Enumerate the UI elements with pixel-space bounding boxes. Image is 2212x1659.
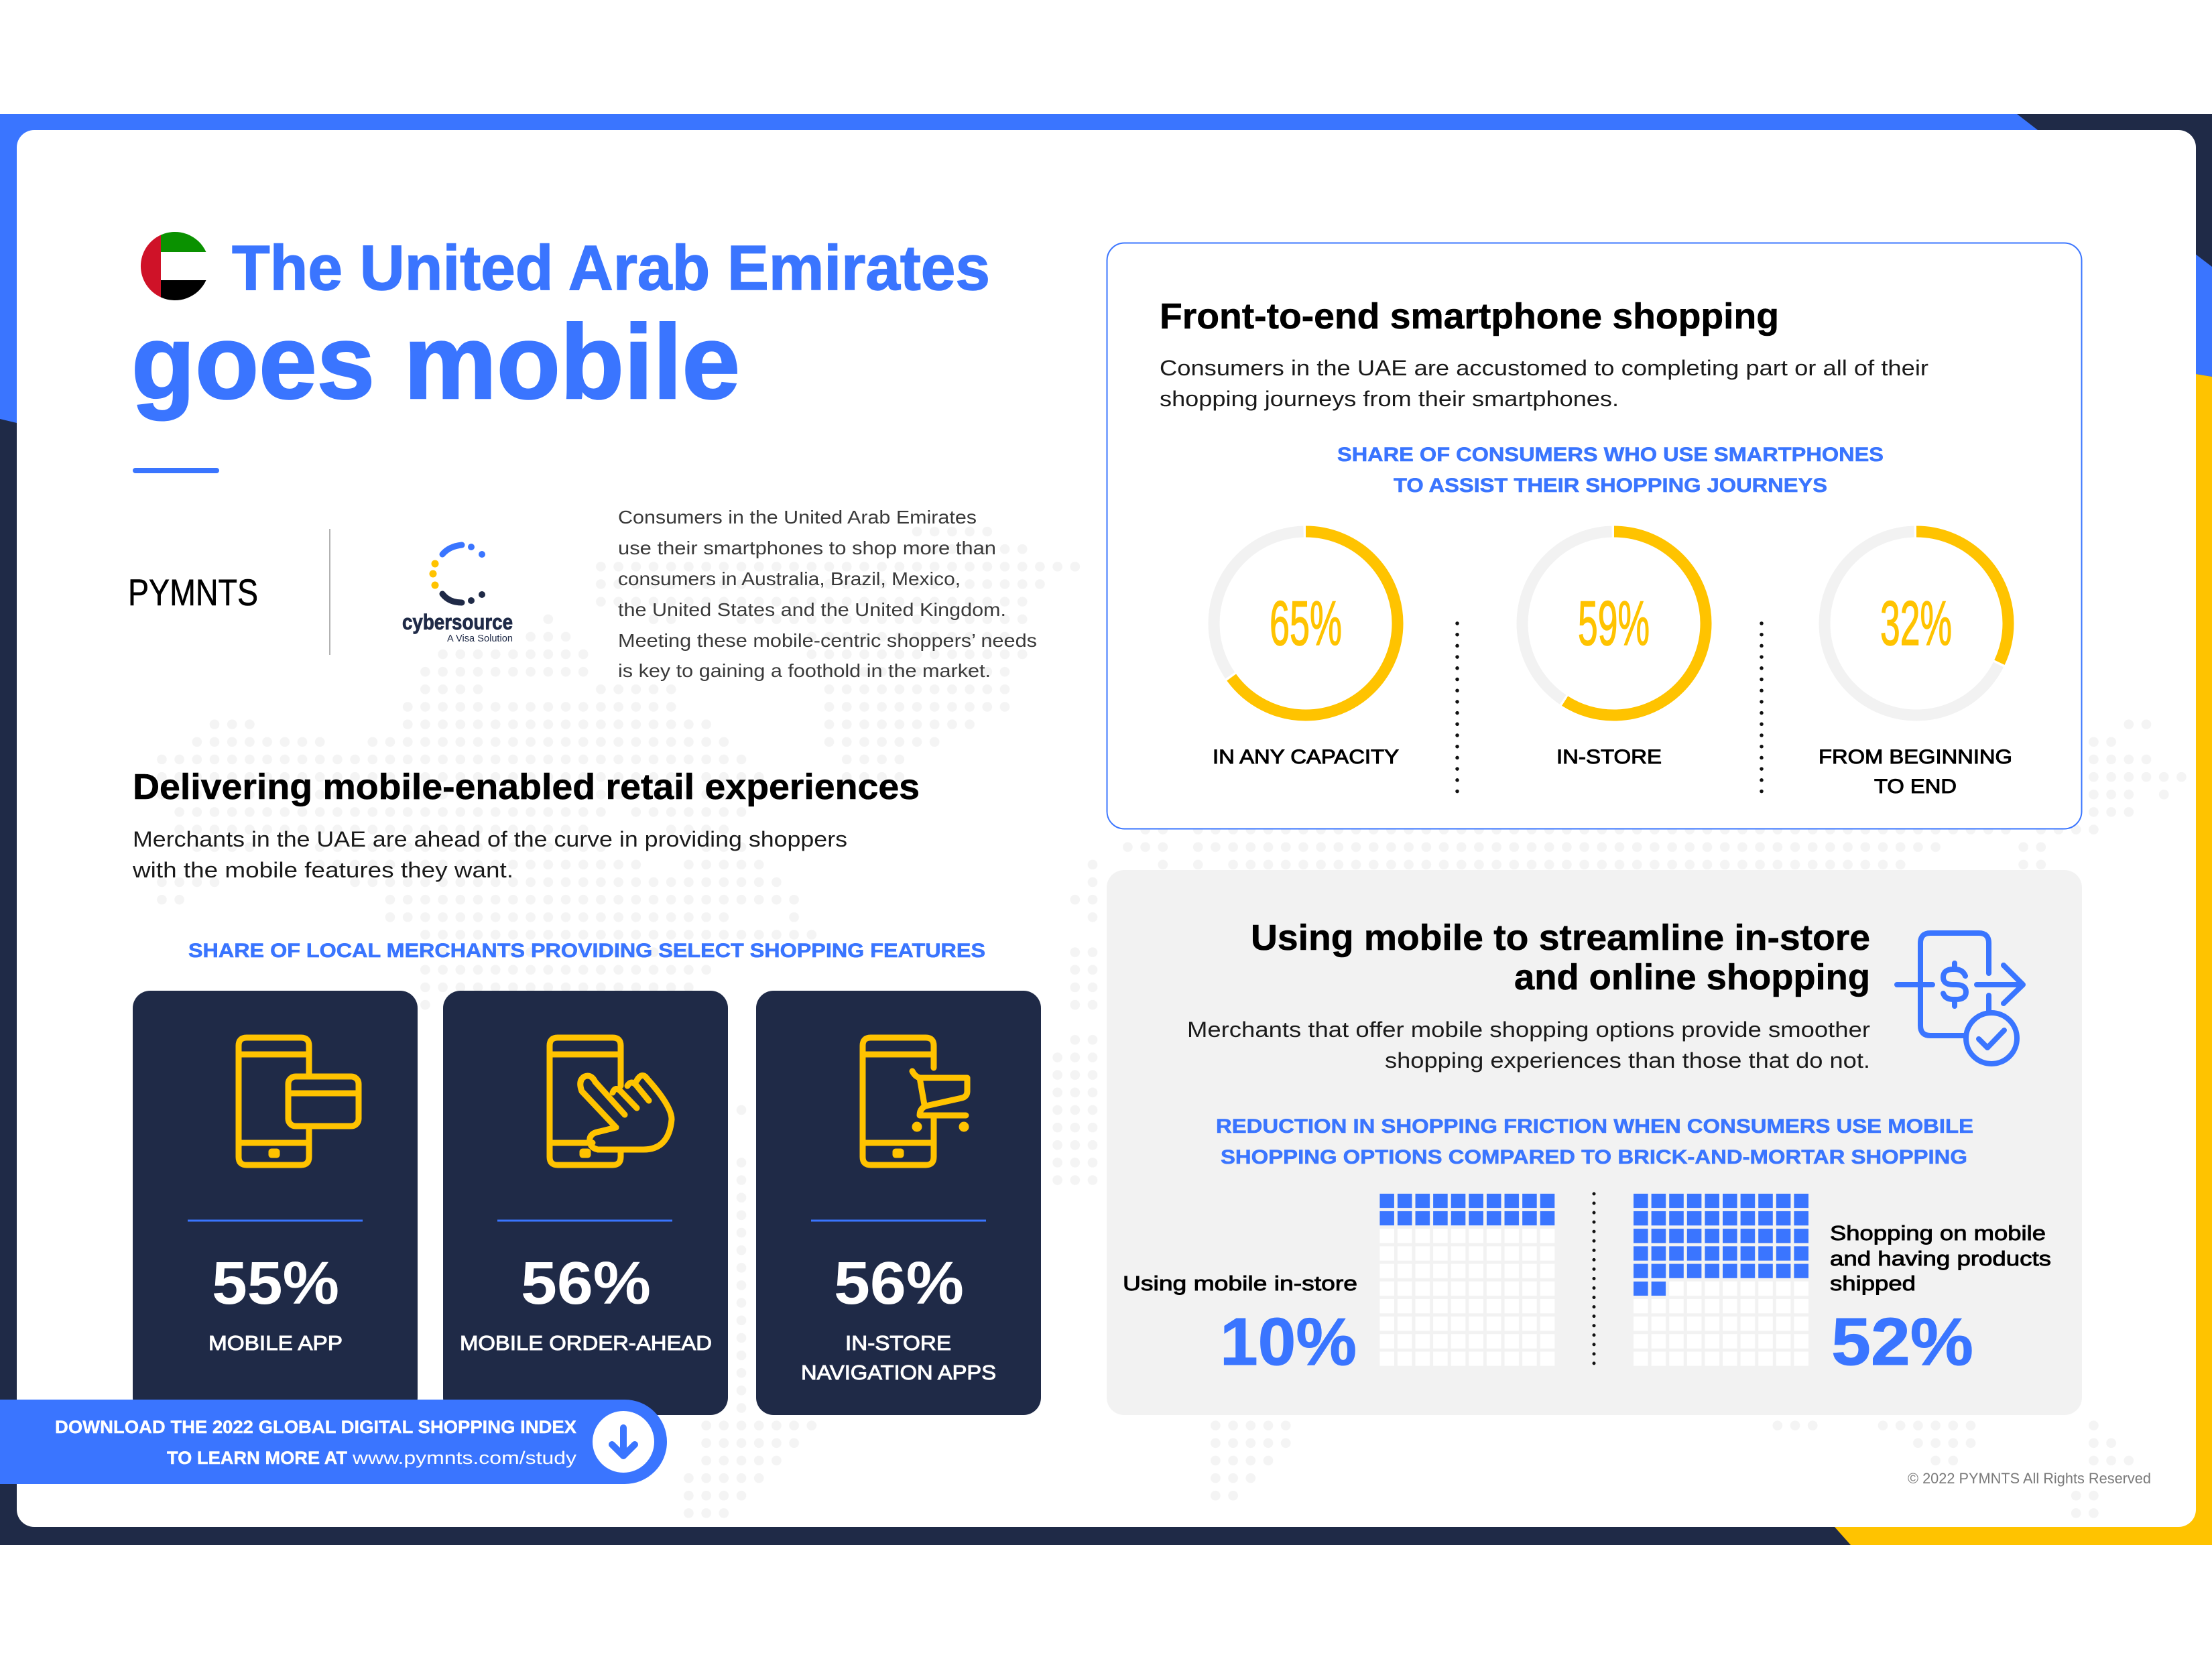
chart label: friction reduction: SHOPPING OPTIONS COMPARED TO BRICK-AND-MORTAR SHOPPING	[1221, 1146, 1967, 1168]
text: merchants intro	[132, 827, 847, 882]
panel: in-store navigation apps: 56%	[834, 1250, 964, 1317]
donut: 32% from beginning to end	[1819, 532, 2012, 798]
stat: shopping on mobile and having products shipped: shipped	[1830, 1272, 1916, 1295]
intro paragraph: the United States and the United Kingdom.	[618, 599, 1006, 620]
logo divider	[329, 529, 330, 655]
panel: mobile order-ahead: 56%	[521, 1250, 651, 1317]
icon: phone with cart	[863, 1038, 967, 1165]
chart label: merchants share: SHARE OF LOCAL MERCHANTS PROVIDING SELECT SHOPPING FEATURES	[188, 940, 985, 962]
heading: streamline: and online shopping	[1514, 957, 1870, 997]
logo: cybersource	[402, 544, 513, 644]
stat: shopping on mobile and having products shipped: 52%	[1831, 1304, 1973, 1379]
icon: UAE flag	[141, 232, 209, 300]
panel: in-store navigation apps: NAVIGATION APPS	[801, 1361, 996, 1384]
intro paragraph: use their smartphones to shop more than	[618, 538, 996, 558]
donut: 32% from beginning to end: TO END	[1874, 776, 1957, 798]
text: merchants smoother experiences	[1187, 1018, 1870, 1072]
panel: in-store navigation apps: IN-STORE	[845, 1331, 951, 1355]
text: merchants smoother experiences: shopping experiences than those that do not.	[1385, 1048, 1870, 1072]
title: goes mobile	[131, 304, 740, 421]
waffle chart: using mobile in-store 10%	[1379, 1194, 1555, 1366]
logo: cybersource: cybersource	[402, 610, 513, 634]
panel: mobile app: MOBILE APP	[208, 1331, 343, 1355]
donut: 32% from beginning to end: 32%	[1880, 588, 1952, 658]
text: consumers description: shopping journeys from their smartphones.	[1160, 387, 1619, 411]
text: consumers description: Consumers in the UAE are accustomed to completing part or all of their	[1160, 356, 1928, 380]
icon: phone with card	[239, 1038, 359, 1165]
panel: mobile app: 55%	[212, 1250, 339, 1317]
donut: 32% from beginning to end: FROM BEGINNING	[1819, 746, 2012, 768]
chart label: friction reduction	[1216, 1115, 1973, 1168]
heading: streamline	[1251, 918, 1870, 997]
panel: in-store navigation apps	[756, 991, 1041, 1415]
intro paragraph: Consumers in the United Arab Emirates	[618, 507, 977, 528]
intro paragraph: is key to gaining a foothold in the market.	[618, 660, 991, 681]
logo: PYMNTS: PYMNTS	[128, 571, 258, 613]
chart label: friction reduction: REDUCTION IN SHOPPING FRICTION WHEN CONSUMERS USE MOBILE	[1216, 1115, 1973, 1138]
donut: 65% in any capacity: 65%	[1270, 588, 1342, 658]
panel: using mobile to streamline	[1107, 870, 2082, 1415]
heading: delivering mobile-enabled retail experiences: Delivering mobile-enabled retail experiences	[133, 767, 920, 807]
text: merchants smoother experiences: Merchants that offer mobile shopping options provide smoother	[1187, 1018, 1870, 1042]
intro paragraph	[618, 507, 1037, 681]
title	[131, 233, 990, 421]
background dot map	[153, 523, 2190, 1522]
callout: download banner: DOWNLOAD THE 2022 GLOBAL DIGITAL SHOPPING INDEX	[55, 1417, 576, 1437]
intro paragraph: consumers in Australia, Brazil, Mexico,	[618, 568, 961, 589]
stat: shopping on mobile and having products shipped: Shopping on mobile	[1830, 1221, 2046, 1245]
heading: front-to-end: Front-to-end smartphone shopping	[1160, 296, 1779, 336]
stat: using mobile in-store	[1123, 1272, 1357, 1379]
donut: 65% in any capacity	[1213, 532, 1399, 768]
icon: download arrow	[593, 1411, 654, 1473]
chart label: consumers share	[1337, 444, 1884, 497]
text: merchants intro: Merchants in the UAE are ahead of the curve in providing shoppers	[133, 827, 847, 851]
panel: mobile app	[133, 991, 418, 1415]
copyright: © 2022 PYMNTS All Rights Reserved	[1908, 1470, 2151, 1487]
icon: phone with hand	[550, 1038, 672, 1165]
title: The United Arab Emirates	[232, 233, 990, 304]
intro paragraph: Meeting these mobile-centric shoppers’ needs	[618, 630, 1037, 651]
stat: shopping on mobile and having products shipped	[1830, 1221, 2051, 1379]
panel: front-to-end smartphone shopping	[1107, 243, 2082, 828]
donut: 59% in-store: 59%	[1578, 588, 1650, 658]
stat: using mobile in-store: 10%	[1220, 1304, 1357, 1379]
chart label: consumers share: TO ASSIST THEIR SHOPPING JOURNEYS	[1394, 475, 1827, 497]
callout: download banner: TO LEARN MORE AT	[167, 1448, 348, 1468]
heading: streamline: Using mobile to streamline in-store	[1251, 918, 1870, 958]
callout: download banner	[0, 1400, 667, 1484]
panel: mobile order-ahead	[443, 991, 728, 1415]
stat: shopping on mobile and having products shipped: and having products	[1830, 1247, 2051, 1270]
text: consumers description	[1160, 356, 1928, 411]
callout: download banner: www.pymnts.com/study	[352, 1448, 577, 1468]
chart label: consumers share: SHARE OF CONSUMERS WHO USE SMARTPHONES	[1337, 444, 1884, 466]
donut: 59% in-store: IN-STORE	[1556, 746, 1662, 768]
panel: mobile order-ahead: MOBILE ORDER-AHEAD	[460, 1331, 712, 1355]
title underline	[133, 468, 219, 473]
logo: cybersource: A Visa Solution	[447, 633, 513, 644]
stat: using mobile in-store: Using mobile in-store	[1123, 1272, 1357, 1295]
waffle chart: shopping on mobile 52%	[1634, 1194, 1808, 1366]
donut: 65% in any capacity: IN ANY CAPACITY	[1213, 746, 1399, 768]
donut: 59% in-store	[1522, 532, 1706, 768]
text: merchants intro: with the mobile features they want.	[132, 858, 513, 882]
icon: payment card with check	[1897, 933, 2023, 1064]
